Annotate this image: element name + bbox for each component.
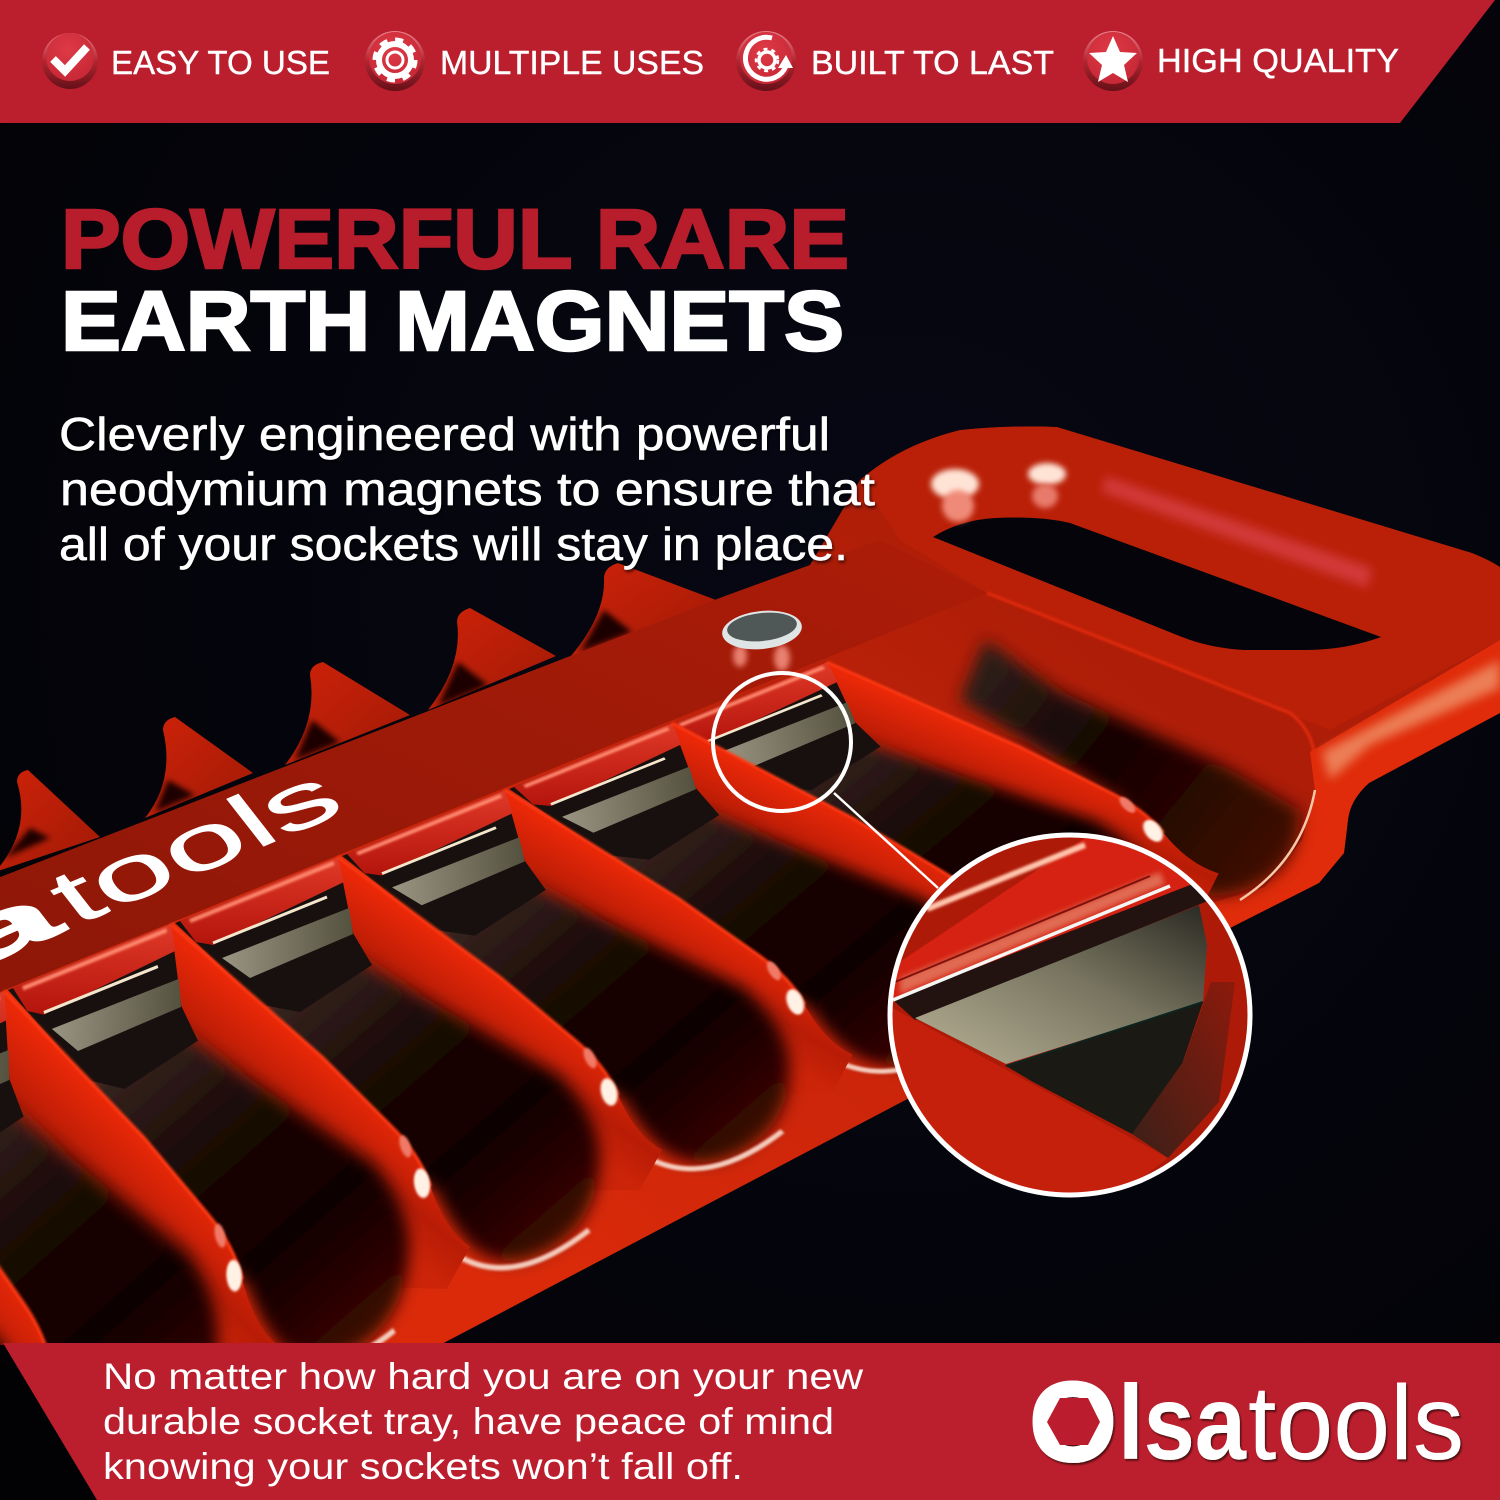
tray teeth xyxy=(0,563,716,872)
handle highlights xyxy=(931,463,1372,588)
icon: gear xyxy=(365,31,425,91)
tray wall edge xyxy=(987,593,1314,752)
finger and magnet slot 0 xyxy=(0,1262,48,1345)
bottom text xyxy=(103,1356,863,1487)
label: high quality: HIGH QUALITY xyxy=(1157,42,1399,79)
tray body xyxy=(0,426,1500,1345)
body text: neodymium magnets to ensure that xyxy=(60,463,875,515)
bottom banner xyxy=(3,1343,1500,1500)
top plate of tray xyxy=(0,540,987,996)
finger and magnet slot 2 xyxy=(8,922,470,1343)
finger and magnet slot 3 xyxy=(175,857,662,1268)
tray logo xyxy=(0,782,338,960)
body text xyxy=(59,408,875,570)
heading xyxy=(61,192,849,368)
body text: Cleverly engineered with powerful xyxy=(59,408,830,460)
rear channel rim xyxy=(1240,790,1315,900)
finger and magnet slot 5 xyxy=(509,722,954,1076)
body text: all of your sockets will stay in place. xyxy=(59,518,848,570)
logo: Olsatools: lsa xyxy=(1118,1364,1247,1482)
bottom banner background xyxy=(3,1343,1500,1500)
right corner glare xyxy=(1322,660,1500,780)
label: multiple uses: MULTIPLE USES xyxy=(440,44,704,81)
icon: built to last xyxy=(736,31,796,91)
rear channel xyxy=(960,640,1300,896)
bottom text: durable socket tray, have peace of mind xyxy=(103,1401,834,1442)
handle opening xyxy=(933,518,1381,650)
small magnifier circle xyxy=(713,673,938,888)
zoom circle: magnet close-up xyxy=(880,825,1260,1210)
rivet magnet xyxy=(720,607,804,671)
heading line: red: POWERFUL RARE xyxy=(61,192,849,286)
logo: Olsatools: O xyxy=(1030,1361,1116,1484)
finger and magnet slot 6 xyxy=(674,660,1219,896)
finger and magnet slot 1 xyxy=(0,988,275,1343)
photo: red socket tray xyxy=(0,426,1500,1345)
bottom text: No matter how hard you are on your new xyxy=(103,1356,863,1397)
logo: Olsatools: tools xyxy=(1248,1364,1464,1482)
banner background xyxy=(0,0,1495,123)
right corner of tray xyxy=(1205,640,1500,935)
icon: check xyxy=(42,33,98,89)
handle shading xyxy=(860,426,1500,730)
top banner xyxy=(0,0,1495,123)
tray logo: tools xyxy=(30,752,360,940)
icon: star xyxy=(1083,31,1143,91)
heading line: white: EARTH MAGNETS xyxy=(61,274,844,368)
bottom text: knowing your sockets won’t fall off. xyxy=(103,1446,743,1487)
label: built to last: BUILT TO LAST xyxy=(811,44,1054,81)
finger and magnet slot 4 xyxy=(338,781,859,1178)
logo: Olsatools xyxy=(1030,1361,1464,1484)
label: easy to use: EASY TO USE xyxy=(111,44,330,81)
